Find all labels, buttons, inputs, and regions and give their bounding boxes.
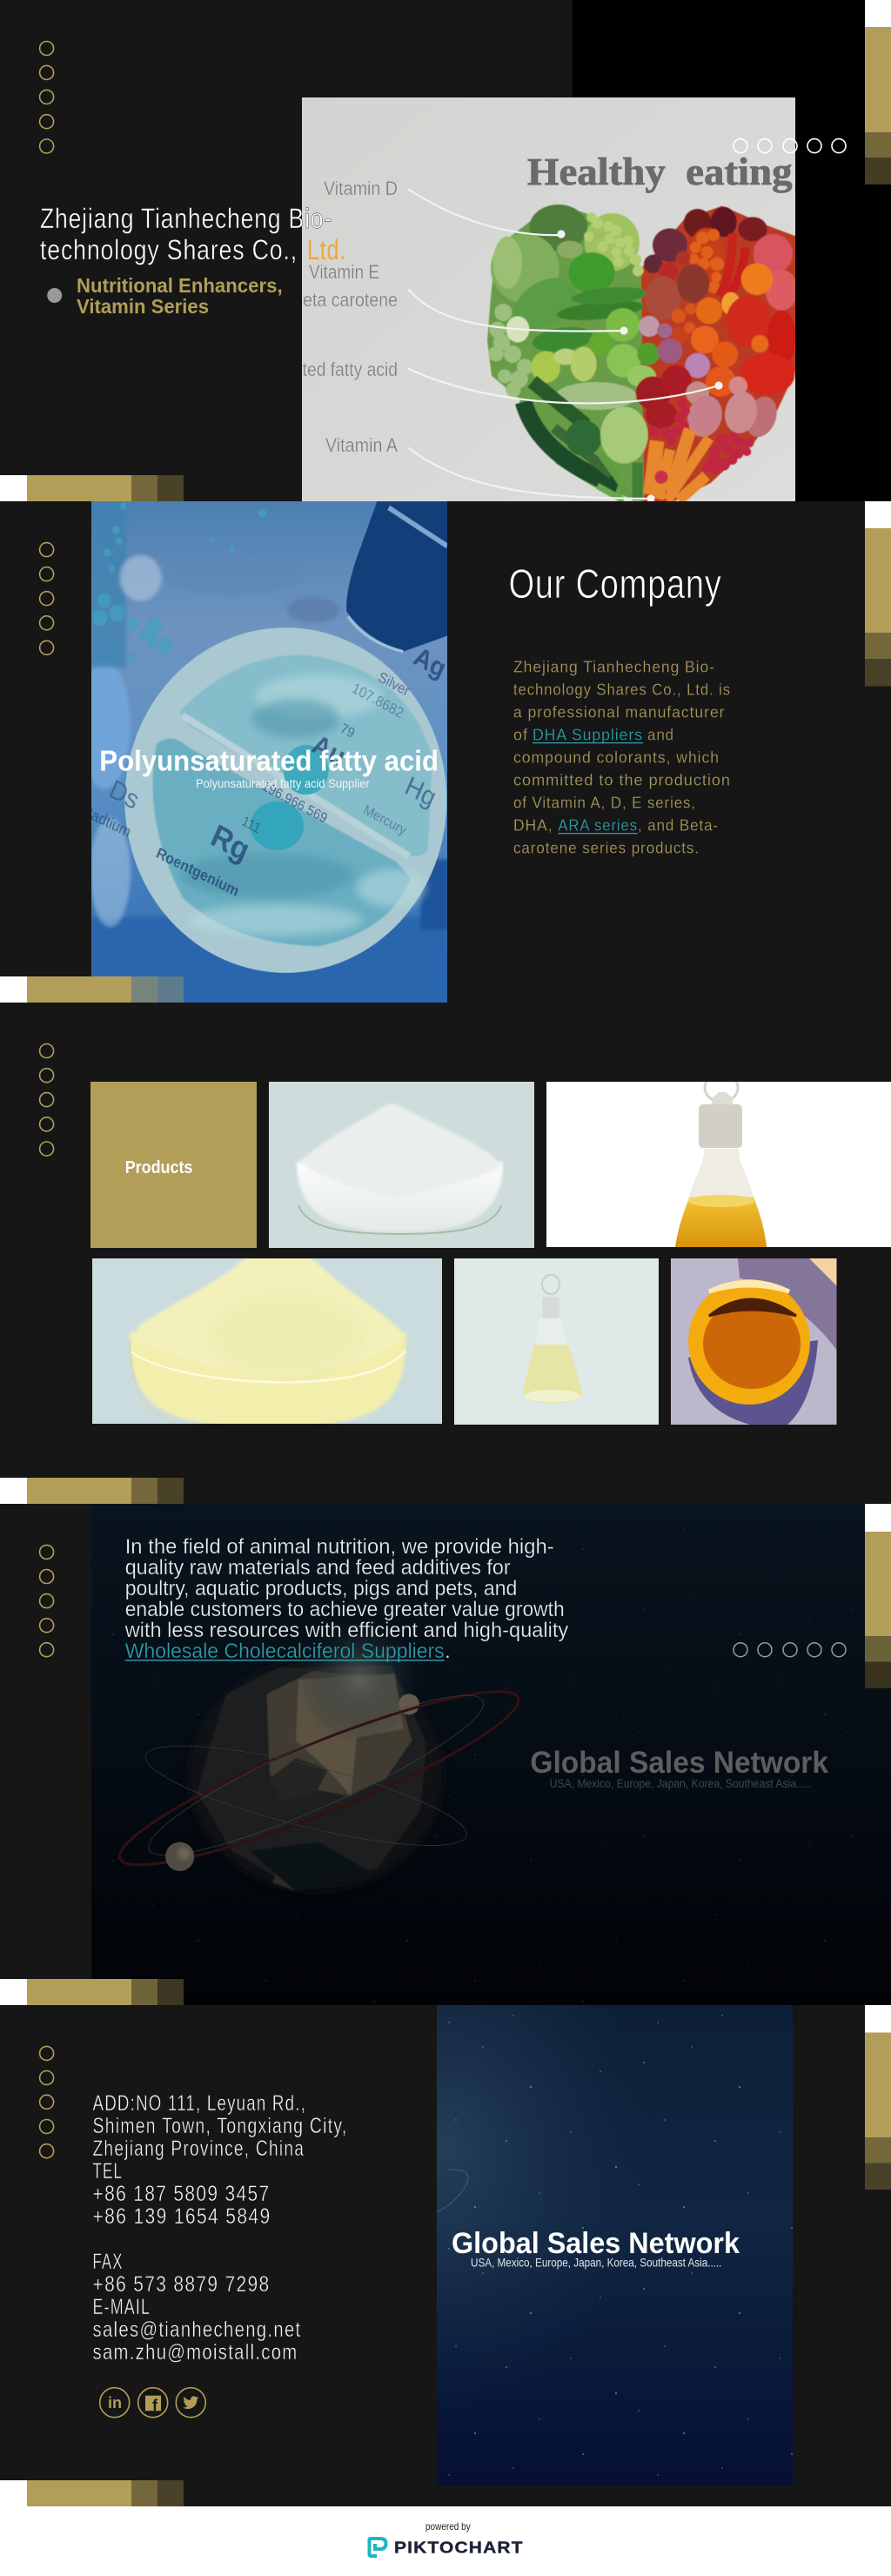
photo: orange oil in bowl bbox=[671, 1258, 837, 1425]
photo: yellow powder in dish bbox=[92, 1253, 442, 1427]
company description: compound colorants, which bbox=[513, 748, 720, 767]
periodic labels in photo: 107.8682 bbox=[350, 680, 406, 721]
company description: of bbox=[513, 726, 528, 744]
photo labels: Beta carotene bbox=[291, 289, 398, 311]
photo: white powder in dish bbox=[269, 1082, 534, 1248]
company description: Zhejiang Tianhecheng Bio- bbox=[513, 658, 715, 676]
contact details: sam.zhu@moistall.com bbox=[92, 2340, 298, 2365]
periodic labels in photo: 111 bbox=[239, 814, 263, 837]
company description: , and Beta- bbox=[638, 816, 719, 835]
photo subheading: Polyunsaturated fatty acid Supplier bbox=[196, 776, 370, 790]
colour strip right bbox=[865, 1504, 891, 1688]
nutrition paragraph: In the field of animal nutrition, we provide high- bbox=[125, 1535, 554, 1559]
photo: space with low-poly planet bbox=[91, 1504, 891, 2005]
colour bar bottom bbox=[0, 2480, 184, 2506]
photo: small flask with pale oil bbox=[454, 1258, 659, 1425]
photo heading: Polyunsaturated fatty acid bbox=[99, 744, 439, 776]
title: Zhejiang Tianhecheng Bio- bbox=[40, 203, 332, 234]
photo: healthy eating vegetable heart bbox=[302, 97, 795, 501]
photo labels: Polyunsaturated fatty acid bbox=[204, 359, 398, 380]
title: technology Shares Co., bbox=[40, 234, 298, 265]
decorative dots left bbox=[40, 543, 54, 654]
colour strip right bbox=[865, 2005, 891, 2190]
periodic labels in photo: Ag bbox=[409, 641, 451, 684]
periodic labels in photo: Rg bbox=[206, 818, 255, 869]
periodic labels in photo: Roentgenium bbox=[154, 844, 241, 900]
orbit rings bbox=[118, 1690, 520, 1866]
periodic labels in photo: Silver bbox=[376, 669, 412, 700]
nutrition paragraph: . bbox=[445, 1640, 451, 1663]
company description: of Vitamin A, D, E series, bbox=[513, 794, 696, 812]
section: contact bbox=[0, 2005, 891, 2506]
faded heading: Global Sales Network bbox=[530, 1746, 829, 1780]
callout lines bbox=[409, 190, 722, 501]
colour bar bottom bbox=[0, 1979, 184, 2005]
periodic labels in photo: 79 bbox=[338, 721, 357, 741]
decorative dots left bbox=[40, 42, 54, 153]
colour strip right bbox=[865, 501, 891, 686]
faded subheading: USA, Mexico, Europe, Japan, Korea, Southeast Asia..... bbox=[550, 1776, 811, 1790]
icon: facebook bbox=[138, 2388, 168, 2418]
section: hero bbox=[0, 0, 891, 502]
icon: piktochart logo bbox=[369, 2539, 386, 2556]
photo: night sky bbox=[437, 2005, 793, 2485]
company description bbox=[513, 658, 731, 857]
colour strip right bbox=[865, 0, 891, 184]
nutrition paragraph: quality raw materials and feed additives for bbox=[125, 1556, 511, 1580]
company description: committed to the production bbox=[513, 771, 731, 789]
company description: DHA, bbox=[513, 816, 553, 835]
contact details: Zhejiang Province, China bbox=[92, 2137, 305, 2161]
section: animal nutrition bbox=[0, 1504, 891, 2005]
subtitle: Nutritional Enhancers, bbox=[77, 274, 283, 297]
decorative dots right bbox=[734, 139, 846, 153]
contact details: sales@tianhecheng.net bbox=[92, 2318, 301, 2342]
products label panel: Products bbox=[125, 1158, 192, 1177]
bubbles bbox=[92, 502, 266, 662]
photo labels: Vitamin E bbox=[309, 261, 379, 283]
planet illustration bbox=[118, 1633, 520, 1892]
icon: linkedin bbox=[100, 2388, 130, 2418]
contact details: Shimen Town, Tongxiang City, bbox=[92, 2114, 348, 2138]
nutrition paragraph bbox=[124, 1535, 569, 1663]
photo heading: Global Sales Network bbox=[452, 2227, 740, 2260]
title bbox=[40, 203, 346, 265]
footer bbox=[0, 2506, 891, 2576]
bullet bbox=[47, 288, 62, 303]
company description: a professional manufacturer bbox=[513, 703, 726, 721]
powered by label: powered by bbox=[425, 2520, 471, 2532]
title: Ltd. bbox=[307, 234, 346, 265]
nutrition paragraph: Wholesale Cholecalciferol Suppliers bbox=[125, 1640, 445, 1663]
contact details: +86 139 1654 5849 bbox=[92, 2204, 271, 2229]
contact details: FAX bbox=[92, 2250, 124, 2274]
decorative dots right bbox=[734, 1643, 846, 1657]
nutrition paragraph: enable customers to achieve greater value growth bbox=[125, 1598, 565, 1621]
periodic labels in photo: Darmstadtium bbox=[48, 786, 133, 841]
photo: cell over periodic table bbox=[91, 501, 447, 1003]
company description: technology Shares Co., Ltd. is bbox=[513, 681, 731, 699]
contact details bbox=[92, 2091, 348, 2365]
heading: our company: Our Company bbox=[509, 560, 722, 607]
contact details: +86 187 5809 3457 bbox=[92, 2182, 270, 2206]
company description: DHA Suppliers bbox=[533, 726, 643, 744]
photo labels: Vitamin A bbox=[325, 434, 398, 456]
contact details: TEL bbox=[92, 2159, 123, 2184]
photo: flask with golden oil bbox=[546, 1074, 891, 1247]
decorative dots left bbox=[40, 1044, 54, 1156]
contact details: E-MAIL bbox=[92, 2295, 151, 2319]
vegetable heart illustration bbox=[487, 205, 798, 502]
company description: and bbox=[647, 726, 674, 744]
icon: facebook: f bbox=[152, 2397, 158, 2414]
periodic labels in photo: Ds bbox=[104, 774, 144, 815]
bottle bbox=[346, 501, 448, 652]
section: products bbox=[0, 1044, 891, 1504]
contact details: +86 573 8879 7298 bbox=[92, 2272, 270, 2297]
contact details: ADD:NO 111, Leyuan Rd., bbox=[92, 2091, 306, 2116]
periodic labels in photo bbox=[91, 649, 446, 896]
photo heading: Healthy eating bbox=[527, 151, 792, 193]
company description: carotene series products. bbox=[513, 839, 700, 857]
photo labels bbox=[302, 181, 398, 452]
piktochart wordmark: PIKTOCHART bbox=[394, 2539, 524, 2556]
periodic labels in photo: 196.966 569 bbox=[259, 778, 330, 827]
products label panel bbox=[90, 1082, 257, 1248]
icon: linkedin: in bbox=[108, 2394, 122, 2412]
nutrition paragraph: with less resources with efficient and high-quality bbox=[124, 1619, 569, 1642]
nutrition paragraph: poultry, aquatic products, pigs and pets, and bbox=[125, 1577, 517, 1600]
cell bbox=[124, 627, 446, 973]
icon: twitter bbox=[176, 2388, 205, 2418]
decorative dots left bbox=[40, 1545, 54, 1657]
colour bar bottom bbox=[0, 475, 184, 501]
periodic labels in photo: Hg bbox=[400, 771, 440, 813]
company description: ARA series bbox=[558, 816, 638, 835]
colour bar bottom bbox=[0, 976, 184, 1003]
black backdrop panel bbox=[573, 0, 891, 501]
periodic labels in photo: Mercury bbox=[361, 802, 409, 839]
photo labels: Vitamin D bbox=[324, 178, 398, 199]
subtitle bbox=[77, 274, 283, 318]
decorative dots left bbox=[40, 2046, 54, 2158]
periodic labels in photo: Au bbox=[308, 729, 350, 773]
section: our company bbox=[0, 501, 891, 1006]
subtitle: Vitamin Series bbox=[77, 295, 209, 318]
photo subheading: USA, Mexico, Europe, Japan, Korea, Southeast Asia..... bbox=[471, 2255, 722, 2269]
colour bar bottom bbox=[0, 1478, 184, 1504]
